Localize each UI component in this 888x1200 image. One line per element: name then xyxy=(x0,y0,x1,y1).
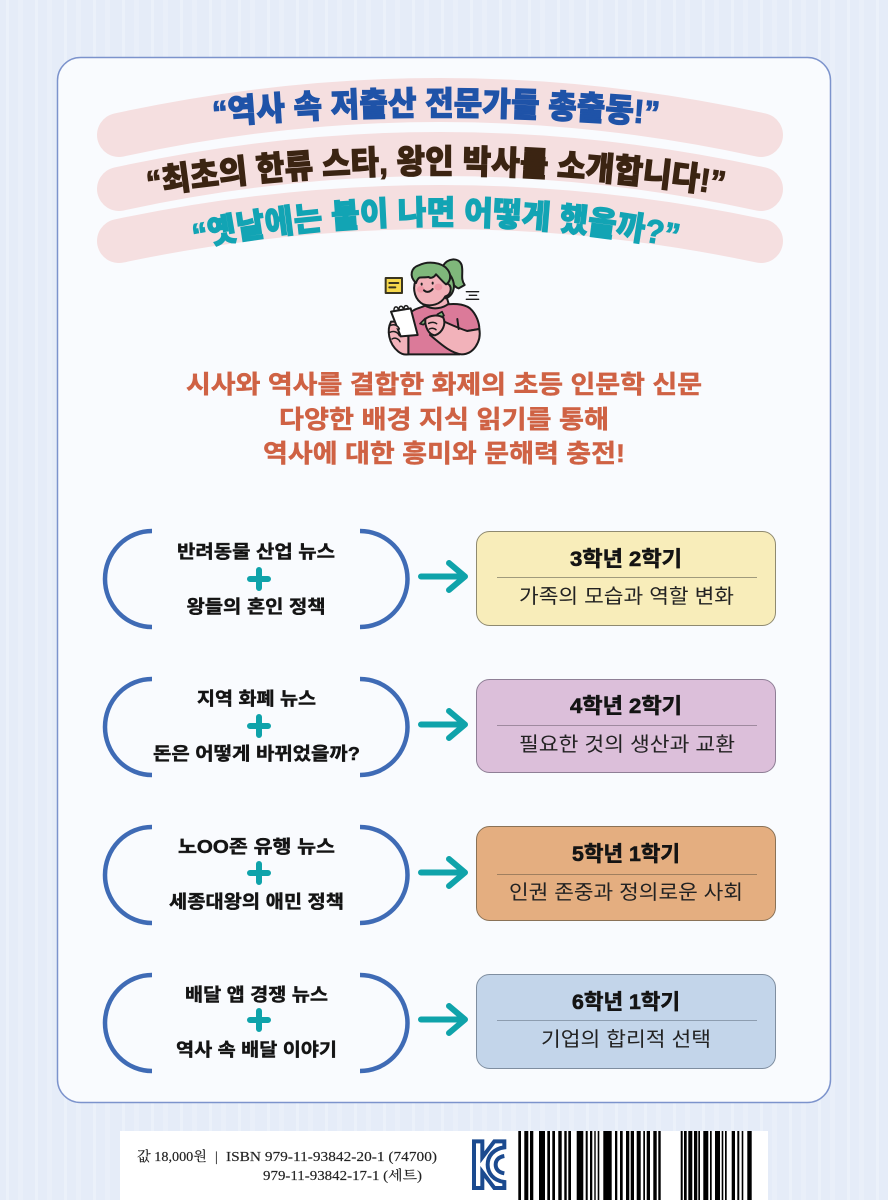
row 3 xyxy=(105,826,776,923)
shirt xyxy=(408,304,479,354)
lead text: 다양한 배경 지식 읽기를 통해 xyxy=(279,406,609,434)
hair fringe xyxy=(412,263,450,284)
arm left xyxy=(389,322,408,355)
brackets xyxy=(105,827,408,923)
brackets xyxy=(105,679,408,775)
plus xyxy=(250,864,268,882)
face xyxy=(414,272,451,305)
grade box xyxy=(476,974,776,1068)
row 4: 기업의 합리적 선택 xyxy=(541,1028,711,1051)
price and ISBN xyxy=(137,1148,437,1183)
row 1: 3학년 2학기 xyxy=(570,548,682,571)
row 3: 인권 존중과 정의로운 사회 xyxy=(509,881,743,904)
eyes and mouth xyxy=(422,283,433,292)
row 2: 필요한 것의 생산과 교환 xyxy=(519,733,735,756)
row 2: 지역 화폐 뉴스 xyxy=(197,689,316,709)
icon: KC mark xyxy=(474,1141,504,1188)
notepad xyxy=(391,308,418,336)
row 4: 6학년 1학기 xyxy=(572,991,680,1014)
row 3: 5학년 1학기 xyxy=(572,843,680,866)
icon: girl taking notes xyxy=(386,259,480,355)
arrow xyxy=(421,563,465,590)
price and ISBN: 값 18,000원 xyxy=(137,1148,207,1164)
grade box xyxy=(476,532,776,626)
main panel xyxy=(58,58,830,1102)
row 1: 반려동물 산업 뉴스 xyxy=(177,542,335,562)
row 2: 돈은 어떻게 바뀌었을까? xyxy=(153,744,360,764)
pen xyxy=(420,312,444,325)
row 1: 왕들의 혼인 정책 xyxy=(186,597,326,617)
row 3: 노OO존 유행 뉴스 xyxy=(178,837,335,857)
row 2 xyxy=(105,679,776,775)
plus xyxy=(250,1011,268,1029)
arm right xyxy=(430,318,480,354)
arrow xyxy=(421,859,465,886)
lead text: 시사와 역사를 결합한 화제의 초등 인문학 신문 xyxy=(186,371,702,399)
grade box xyxy=(476,680,776,772)
finger lines xyxy=(429,322,437,330)
row 4 xyxy=(105,974,776,1071)
fingers xyxy=(390,325,400,342)
row 4: 배달 앱 경쟁 뉴스 xyxy=(185,985,328,1005)
plus xyxy=(250,570,268,588)
price and ISBN: ISBN 979-11-93842-20-1 (74700) xyxy=(226,1149,437,1164)
spiral xyxy=(394,306,408,311)
ponytail xyxy=(443,259,465,288)
row 4: 역사 속 배달 이야기 xyxy=(176,1040,337,1060)
text lines mark xyxy=(466,292,479,299)
row 1: 가족의 모습과 역할 변화 xyxy=(519,585,734,608)
price and ISBN: 979-11-93842-17-1 (세트) xyxy=(263,1167,422,1183)
grade box xyxy=(476,826,776,920)
row 2: 4학년 2학기 xyxy=(570,695,682,718)
headline: blue: “역사 속 저출산 전문가들 총출동!” xyxy=(214,86,659,126)
barcode strip xyxy=(120,1131,768,1200)
neck xyxy=(423,295,449,308)
lead text xyxy=(186,371,702,468)
blush xyxy=(417,284,442,293)
headline: teal: “옛날에는 불이 나면 어떻게 했을까?” xyxy=(192,196,680,247)
curved pink banners xyxy=(119,100,761,241)
hand right xyxy=(425,316,444,335)
hair back xyxy=(440,268,454,298)
arrow xyxy=(421,711,465,738)
lead text: 역사에 대한 흥미와 문해력 충전! xyxy=(263,440,625,468)
arrow xyxy=(421,1006,465,1033)
brackets xyxy=(105,531,408,627)
headline: brown: “최초의 한류 스타, 왕인 박사를 소개합니다!” xyxy=(147,144,726,194)
row 3: 세종대왕의 애민 정책 xyxy=(169,892,344,912)
barcode xyxy=(518,1131,752,1200)
price and ISBN: | xyxy=(215,1149,218,1164)
row 1 xyxy=(105,531,776,627)
sleeve crease xyxy=(457,319,459,329)
brackets xyxy=(105,975,408,1071)
sticky note xyxy=(386,278,402,293)
plus xyxy=(250,717,268,735)
